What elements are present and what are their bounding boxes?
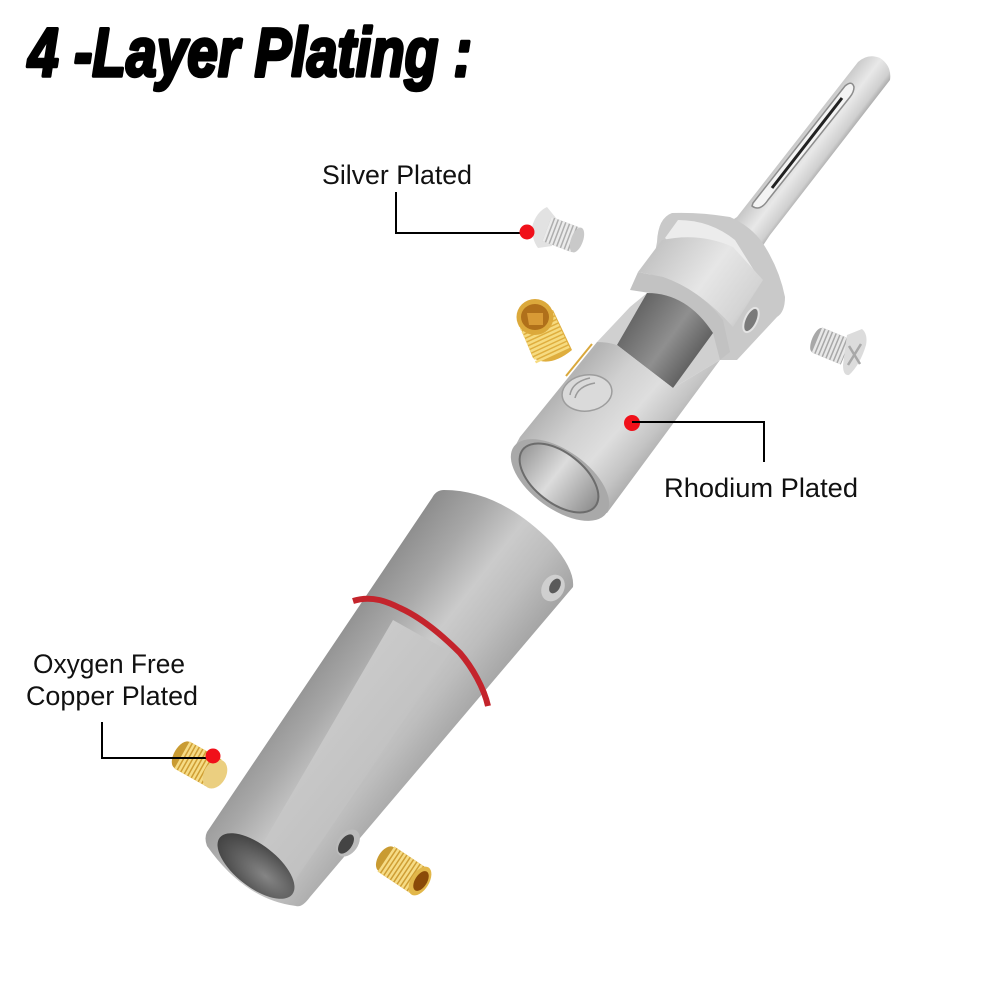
red ring [353,599,488,706]
lower body [513,342,720,513]
sleeve lighter facet [262,620,450,885]
silver screw: labelled [532,207,587,254]
inner tube [617,293,713,388]
callout: oxygen free copper plated [26,649,220,764]
callout: rhodium plated [624,415,858,503]
callout: rhodium plated: Rhodium Plated [664,473,858,503]
callout: silver plated: Silver Plated [322,160,472,190]
cutout side walls [597,293,720,388]
title: 4 -Layer Plating : [26,14,472,91]
threaded hole [560,372,614,414]
pin flange [650,213,785,360]
sleeve lower hole [331,825,365,861]
collar lower lip [630,272,730,360]
gold sliver [566,344,592,376]
gold screw: copper plated [168,738,232,793]
connector pin assembly [497,56,890,537]
body open end [497,423,623,537]
pin shaft [725,56,890,250]
callout: silver plated [322,160,534,240]
sleeve open end [207,821,305,911]
gold insert: large [516,299,572,362]
silver screw: right [807,326,866,375]
cone sleeve [206,490,573,911]
callout: oxygen free copper plated: Oxygen Free [33,649,185,679]
collar set-screw hole [740,306,762,334]
callout: oxygen free copper plated: Copper Plated [26,681,198,711]
gold insert: small bottom [372,843,436,899]
upper collar [638,237,763,327]
sleeve side hole [536,570,570,606]
